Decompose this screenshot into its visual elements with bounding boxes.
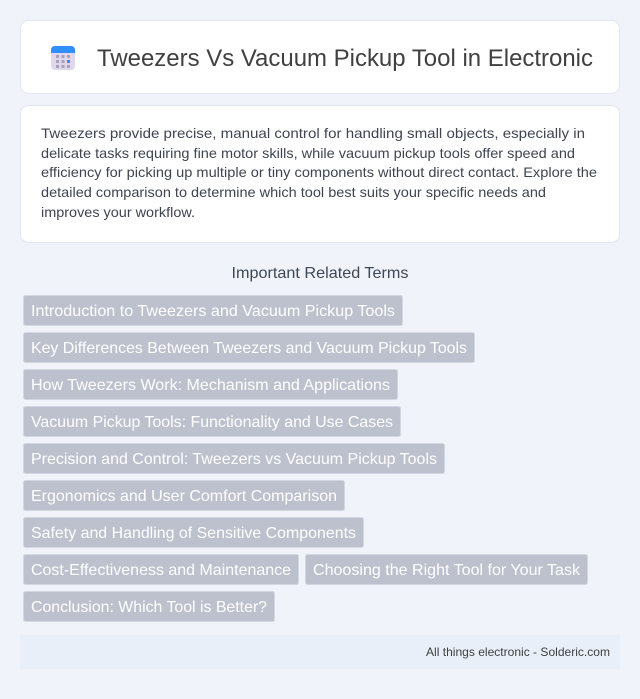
heading: important related terms: Important Related Terms (232, 265, 408, 282)
tag: key differences (24, 332, 474, 362)
tag: introduction (24, 296, 402, 326)
tag: choosing the right tool (306, 554, 588, 584)
tag list (24, 296, 588, 622)
tag: choosing the right tool: Choosing the Right Tool for Your Task (313, 562, 581, 579)
tag: conclusion: Conclusion: Which Tool is Better? (31, 599, 267, 616)
tag: precision and control (24, 444, 444, 474)
text block: description: detailed comparison to determine which tool best suits your specific needs and (41, 184, 546, 200)
tag: precision and control: Precision and Control: Tweezers vs Vacuum Pickup Tools (31, 451, 437, 468)
tag: ergonomics: Ergonomics and User Comfort Comparison (31, 488, 337, 505)
tag: safety (24, 518, 364, 548)
tag: key differences: Key Differences Between Tweezers and Vacuum Pickup Tools (31, 340, 467, 357)
tag: vacuum pickup tools (24, 406, 400, 436)
tag: cost-effectiveness: Cost-Effectiveness and Maintenance (31, 562, 291, 579)
panel: title card (20, 20, 620, 94)
text block: description: improves your workflow. (41, 204, 195, 220)
panel: description (20, 106, 620, 242)
tag: cost-effectiveness (24, 554, 298, 584)
text block: description: efficiency for picking up multiple or tiny components without direct contact. Explore the (41, 164, 597, 180)
icon: calendar grid (51, 46, 75, 70)
tag: ergonomics (24, 480, 344, 510)
tag: safety: Safety and Handling of Sensitive Components (31, 525, 356, 542)
title: Tweezers Vs Vacuum Pickup Tool in Electronic (97, 45, 593, 72)
tag: introduction: Introduction to Tweezers and Vacuum Pickup Tools (31, 303, 395, 320)
text block: description (41, 125, 597, 220)
text block: description: delicate tasks requiring fine motor skills, while vacuum pickup tools offer speed and (41, 145, 575, 161)
footer: All things electronic - Solderic.com (426, 645, 610, 659)
tag: vacuum pickup tools: Vacuum Pickup Tools: Functionality and Use Cases (31, 414, 393, 431)
tag: conclusion (24, 592, 274, 622)
footer (20, 635, 620, 669)
tag: how tweezers work (24, 370, 398, 400)
text block: description: Tweezers provide precise, manual control for handling small objects, especially in (41, 125, 585, 141)
tag: how tweezers work: How Tweezers Work: Mechanism and Applications (31, 377, 390, 394)
